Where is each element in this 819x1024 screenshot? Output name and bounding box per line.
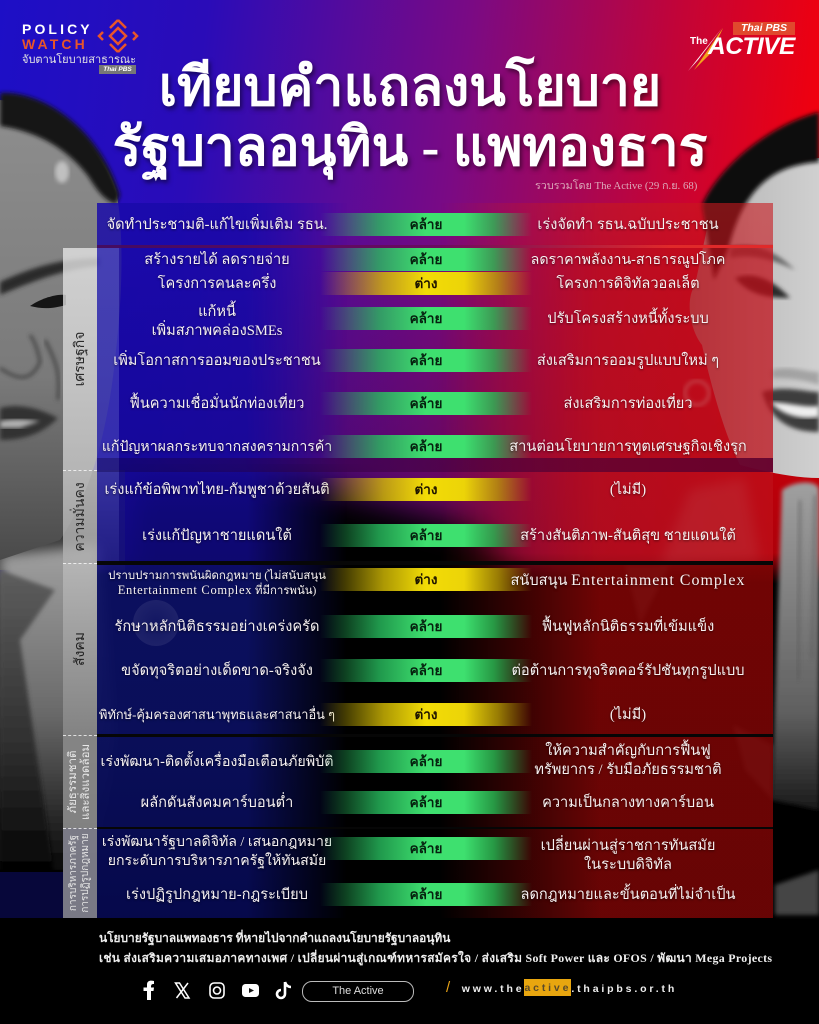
footnote: นโยบายรัฐบาลแพทองธาร ที่หายไปจากคำแถลงนโยบายรัฐบาลอนุทิน (99, 931, 450, 945)
row: debt (152, 300, 709, 339)
neck shadow (0, 470, 125, 570)
logo: The Active: Thai PBS (741, 22, 787, 34)
handle pill (302, 981, 414, 1002)
title: รัฐบาลอนุทิน - แพทองธาร (113, 117, 707, 177)
row: rule of law (114, 615, 714, 638)
row: constitution: คล้าย (410, 217, 442, 232)
panel: economy (63, 248, 747, 470)
row: debt: ปรับโครงสร้างหนี้ทั้งระบบ (547, 311, 709, 327)
row: tourism (129, 392, 693, 415)
row: trade war: สานต่อนโยบายการทูตเศรษฐกิจเชิงรุก (509, 439, 747, 455)
title: เทียบคำแถลงนโยบาย (159, 57, 661, 117)
lower left navy (0, 872, 63, 918)
side label: security (63, 470, 97, 563)
side label: disaster: ภัยธรรมชาติ (67, 750, 79, 813)
credit note: รวบรวมโดย The Active (29 ก.ย. 68) (535, 180, 697, 192)
row: warning devices: คล้าย (410, 754, 442, 769)
row: law reform (126, 883, 736, 906)
row: digital government: เร่งพัฒนารัฐบาลดิจิทัล / เสนอกฎหมาย (102, 834, 332, 850)
row: savings: ส่งเสริมการออมรูปแบบใหม่ ๆ (537, 353, 719, 369)
side label: disaster: และสิ่งแวดล้อม (80, 743, 92, 820)
row: warning devices: เร่งพัฒนา-ติดตั้งเครื่องมือเตือนภัยพิบัติ (100, 754, 334, 770)
row: rule of law: ฟื้นฟูหลักนิติธรรมที่เข้มแข็ง (542, 619, 714, 635)
logo: The Active (688, 22, 796, 71)
row: half-half (157, 272, 700, 295)
section dividers (97, 458, 773, 472)
side label: disaster (63, 735, 97, 828)
row: warning devices: ทรัพยากร / รับมือภัยธรรมชาติ (534, 762, 722, 778)
logo: Policy Watch (22, 19, 139, 74)
row: constitution: จัดทำประชามติ-แก้ไขเพิ่มเติม รธน. (107, 217, 327, 233)
footnote (99, 930, 772, 966)
logo: Policy Watch: WATCH (22, 36, 88, 52)
icon: facebook (144, 981, 154, 1000)
title (113, 56, 712, 186)
row: southern border: เร่งแก้ปัญหาชายแดนใต้ (142, 528, 292, 544)
row: corruption: ขจัดทุจริตอย่างเด็ดขาด-จริงจัง (121, 663, 313, 679)
website url: / www.the .thaipbs.or.th (446, 979, 677, 996)
row: digital government: คล้าย (410, 841, 442, 856)
row: gambling (108, 568, 745, 598)
panel: disaster and environment (63, 735, 722, 828)
row: income: ลดราคาพลังงาน-สาธารณูปโภค (531, 252, 725, 268)
logo: Policy Watch: จับตานโยบายสาธารณะ (22, 54, 136, 66)
row: corruption: คล้าย (410, 663, 442, 678)
icon: tiktok (277, 982, 291, 998)
row: Cambodia: ต่าง (415, 482, 437, 497)
right figure: woman's jacket (625, 478, 773, 800)
face tint through blue panel (97, 248, 119, 563)
row: income: สร้างรายได้ ลดรายจ่าย (144, 252, 290, 268)
side label: economy (63, 248, 97, 470)
row: corruption: ต่อต้านการทุจริตคอร์รัปชันทุกรูปแบบ (511, 663, 745, 679)
panel: public administration: ยกระดับการบริหารภาครัฐให้ทันสมัย (108, 853, 326, 869)
row: half-half: โครงการดิจิทัลวอลเล็ต (556, 276, 700, 292)
logo: Policy Watch: POLICY (22, 21, 93, 37)
logo: The Active: ACTIVE (708, 33, 795, 60)
lapel pin (133, 600, 179, 646)
dark suit of man (130, 480, 520, 640)
right red overlay panel (440, 203, 773, 918)
row: constitution (107, 213, 719, 236)
side label: administration: การปฏิรูปกฎหมาย (80, 833, 91, 913)
row: rule of law: คล้าย (410, 619, 442, 634)
row: trade war: คล้าย (410, 439, 442, 454)
side label: security: ความมั่นคง (71, 482, 87, 551)
row: law reform: ลดกฎหมายและขั้นตอนที่ไม่จำเป็น (521, 887, 735, 903)
row: gambling: Entertainment Complex ที่มีการพนัน) (118, 583, 316, 597)
footnote: เช่น ส่งเสริมความเสมอภาคทางเพศ / เปลี่ยนผ่านสู่เกณฑ์ทหารสมัครใจ / ส่งเสริม Soft Power และ OFOS / พัฒนา Mega Projects (99, 951, 772, 965)
panel: security (63, 470, 736, 563)
row: warning devices (100, 740, 722, 778)
row: law reform: เร่งปฏิรูปกฎหมาย-กฎระเบียบ (126, 887, 308, 903)
row: digital government (102, 834, 716, 873)
row: warning devices: ให้ความสำคัญกับการฟื้นฟู (545, 743, 711, 759)
row: constitution: เร่งจัดทำ รธน.ฉบับประชาชน (537, 217, 719, 233)
row: low carbon (140, 791, 714, 814)
panel: public administration: ในระบบดิจิทัล (584, 857, 672, 873)
row: low carbon: ความเป็นกลางทางคาร์บอน (542, 795, 714, 811)
right figure: woman's hands (772, 482, 819, 915)
row: southern border (142, 524, 736, 547)
icon: instagram (210, 983, 224, 998)
row: Cambodia: (ไม่มี) (610, 482, 646, 498)
row: savings: เพิ่มโอกาสการออมของประชาชน (113, 353, 321, 369)
panel: society (63, 563, 745, 735)
row: savings: คล้าย (410, 353, 442, 368)
side label: society: สังคม (71, 632, 87, 666)
side label: administration (63, 828, 97, 918)
row: Cambodia (104, 478, 647, 501)
logo: The Active: The (690, 36, 708, 47)
row: low carbon: ผลักดันสังคมคาร์บอนต่ำ (141, 795, 293, 811)
row: half-half: ต่าง (415, 276, 437, 291)
panel: public administration (63, 828, 736, 918)
row: religion (98, 703, 646, 726)
row: gambling: ปราบปรามการพนันผิดกฎหมาย (ไม่สนับสนุน (108, 570, 326, 582)
left blue overlay panel (97, 203, 347, 918)
row: income (144, 248, 726, 271)
row: half-half: โครงการคนละครึ่ง (158, 276, 276, 292)
row: rule of law: รักษาหลักนิติธรรมอย่างเคร่งครัด (114, 619, 319, 635)
row: tourism: ฟื้นความเชื่อมั่นนักท่องเที่ยว (129, 396, 304, 412)
icon: youtube (242, 984, 259, 997)
row: religion: พิทักษ์-คุ้มครองศาสนาพุทธและศาสนาอื่น ๆ (99, 708, 335, 722)
row: law reform: คล้าย (410, 887, 442, 902)
row: Cambodia: เร่งแก้ข้อพิพาทไทย-กัมพูชาด้วยสันติ (104, 482, 330, 498)
right figure: woman's face (685, 112, 819, 478)
row: religion: (ไม่มี) (610, 707, 646, 723)
row: debt: คล้าย (410, 311, 442, 326)
row: southern border: สร้างสันติภาพ-สันติสุข ชายแดนใต้ (520, 528, 736, 544)
side label: society (63, 563, 97, 735)
icon: X (176, 983, 189, 998)
panel: economy: เพิ่มสภาพคล่องSMEs (152, 323, 282, 339)
row: southern border: คล้าย (410, 528, 442, 543)
left figure: man's shirt and tie (0, 545, 115, 880)
row: trade war: แก้ปัญหาผลกระทบจากสงครามการค้า (102, 439, 332, 455)
row: income: คล้าย (410, 252, 442, 267)
side label: economy: เศรษฐกิจ (71, 332, 87, 386)
row: digital government: เปลี่ยนผ่านสู่ราชการทันสมัย (541, 838, 715, 854)
row: low carbon: คล้าย (410, 795, 442, 810)
row: tourism: คล้าย (410, 396, 442, 411)
row: tourism: ส่งเสริมการท่องเที่ยว (563, 396, 693, 412)
social icons (144, 980, 291, 1000)
row: corruption (121, 659, 745, 682)
website url: active (524, 982, 571, 994)
row: religion: ต่าง (415, 707, 437, 722)
side label: administration: การบริหารภาครัฐ (68, 835, 79, 911)
logo: Policy Watch: Thai PBS (103, 66, 132, 73)
row: debt: แก้หนี้ (198, 304, 236, 320)
row: trade war (102, 435, 747, 458)
left figure: man's face (0, 93, 122, 560)
row: savings (113, 349, 720, 372)
row: gambling: สนับสนุน Entertainment Complex (511, 572, 745, 589)
row: gambling: ต่าง (415, 572, 437, 587)
handle pill: The Active (332, 985, 384, 997)
